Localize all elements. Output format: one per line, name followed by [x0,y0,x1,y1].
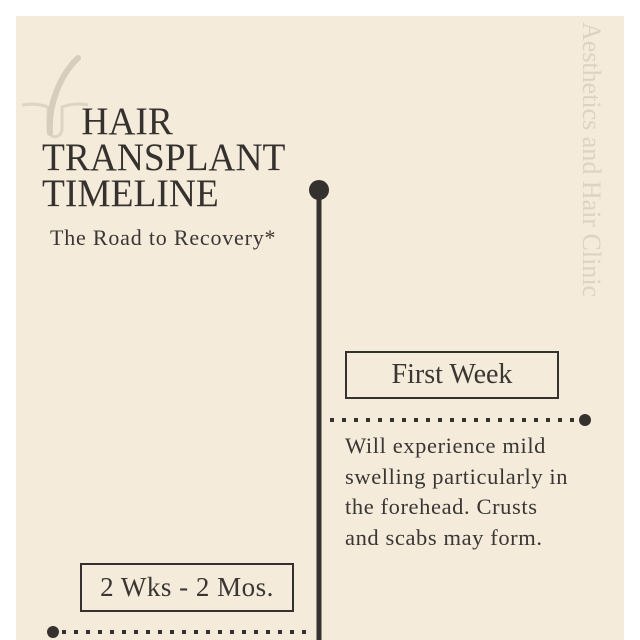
text: first week description: Will experience mild [345,433,546,458]
label box: 2 Wks - 2 Mos. [80,563,294,612]
label box: First Week: First Week [392,359,512,390]
title: TRANSPLANT [42,136,285,179]
title: HAIR [81,100,173,143]
connector: 2 weeks [47,626,306,638]
text: first week description: the forehead. Crusts [345,494,538,519]
text: first week description: swelling particularly in [345,464,568,488]
label box: 2 Wks - 2 Mos.: 2 Wks - 2 Mos. [100,572,274,602]
connector: first week [330,414,591,426]
subtitle: The Road to Recovery* [50,225,276,250]
text: first week description: and scabs may form. [345,524,543,550]
icon: hair follicle [22,55,88,138]
label box: First Week [345,351,559,399]
text: first week description [345,433,568,550]
title: TIMELINE [42,172,219,215]
title [42,100,285,215]
watermark: clinic name: Aesthetics and Hair Clinic [577,22,606,297]
